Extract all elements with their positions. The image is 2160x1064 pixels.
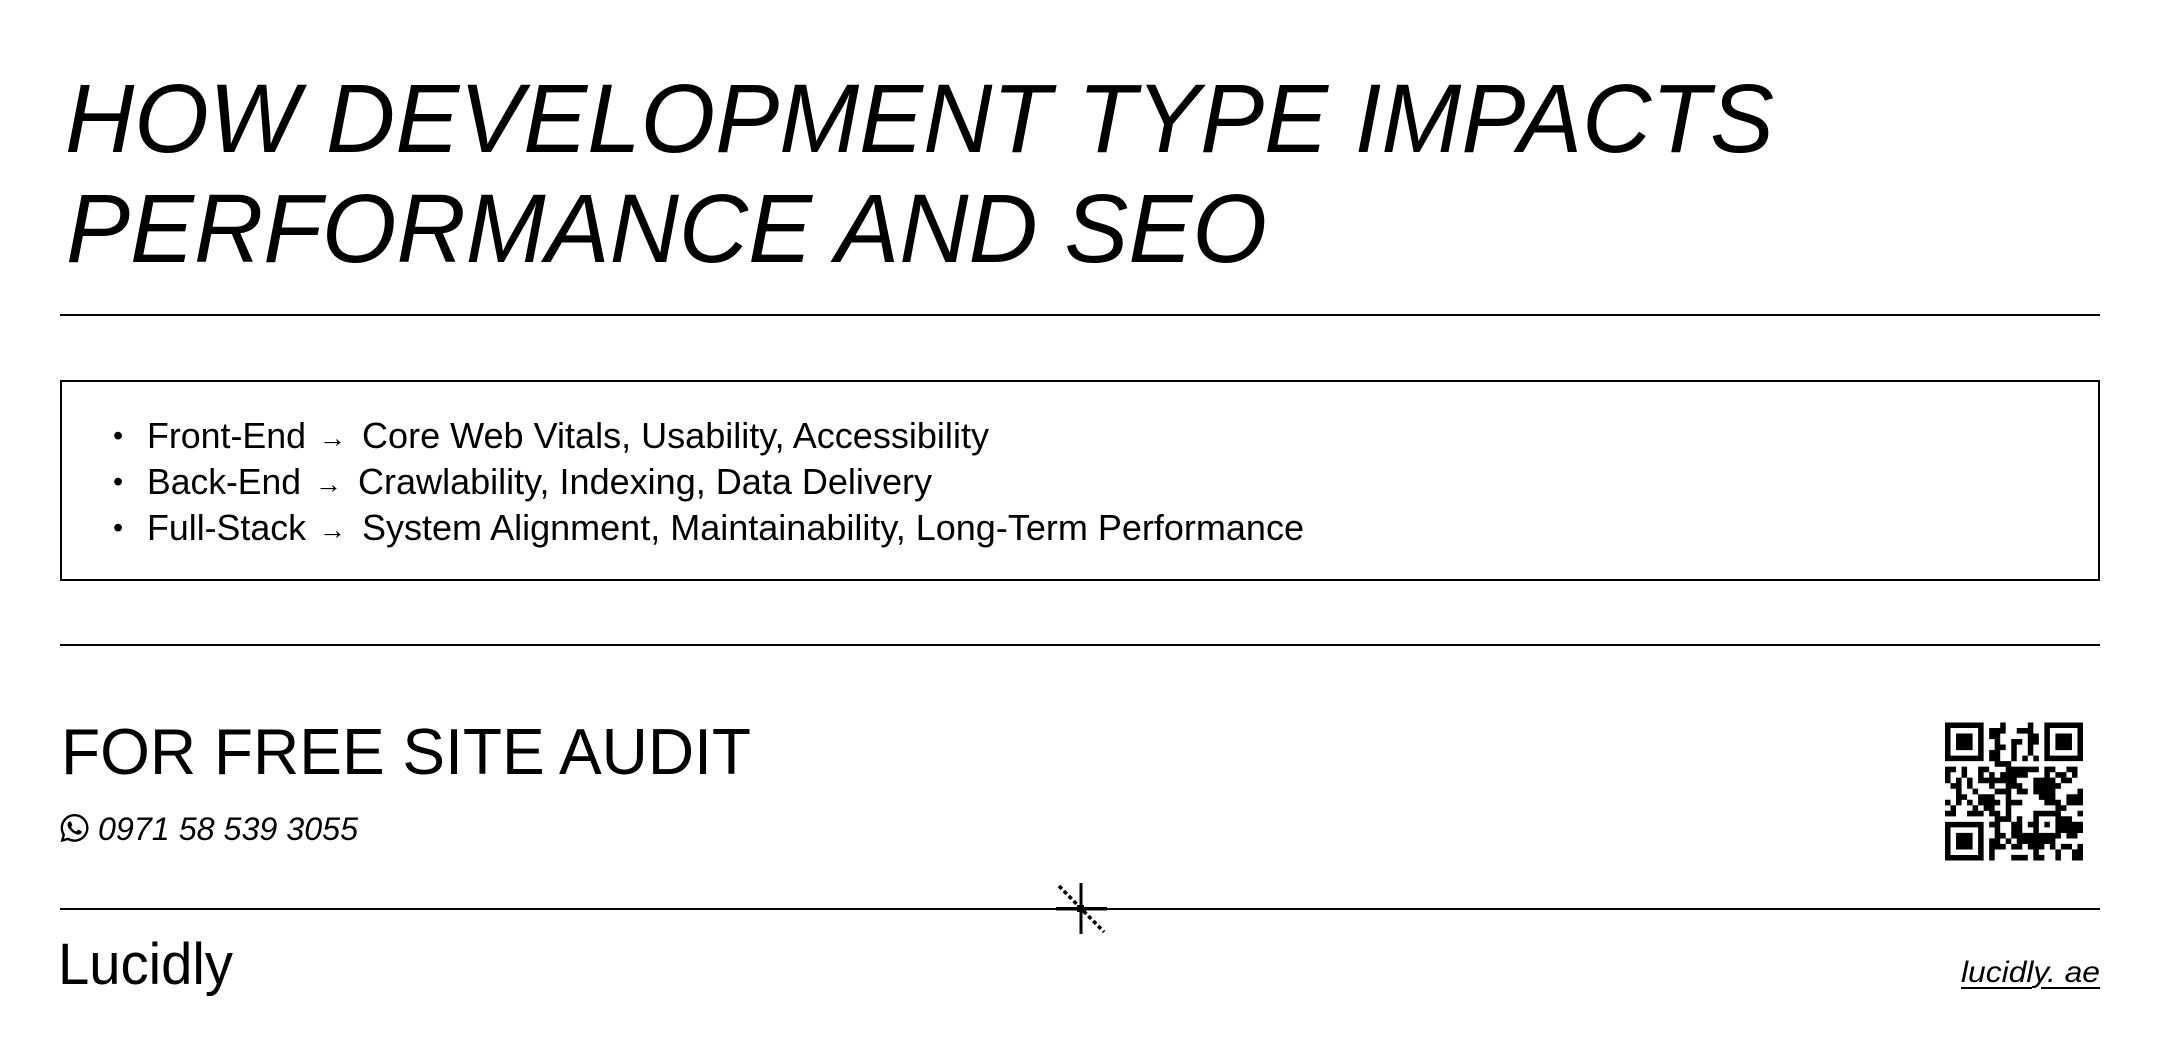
list item: full-stack: System Alignment, Maintainability, Long-Term Performance <box>362 507 1304 548</box>
title: HOW DEVELOPMENT TYPE IMPACTS <box>65 64 1774 173</box>
icon: qr code <box>1945 722 2083 860</box>
logo: Lucidly: Lucidly <box>58 932 233 997</box>
list item: full-stack: → <box>319 515 346 545</box>
list item: back-end: • <box>113 466 123 498</box>
list item: back-end: Crawlability, Indexing, Data Delivery <box>358 461 932 502</box>
website link: lucidly. ae <box>1961 956 2100 989</box>
list item: full-stack: • <box>113 512 123 544</box>
icon: asterisk divider mark <box>1056 883 1107 934</box>
list item: front-end: Core Web Vitals, Usability, Accessibility <box>362 415 989 456</box>
phone number: 0971 58 539 3055 <box>98 811 358 847</box>
icon: whatsapp <box>61 814 89 842</box>
list item: back-end: → <box>315 469 342 499</box>
list item: back-end: Back-End <box>147 461 301 502</box>
list item: full-stack: Full-Stack <box>147 507 307 548</box>
title <box>65 64 1774 283</box>
heading: call to action: FOR FREE SITE AUDIT <box>61 715 751 788</box>
list item: front-end: Front-End <box>147 415 306 456</box>
list item: front-end: → <box>319 423 346 453</box>
list item: front-end: • <box>113 420 123 452</box>
title: PERFORMANCE AND SEO <box>66 174 1267 283</box>
panel: development types list <box>61 381 2099 580</box>
